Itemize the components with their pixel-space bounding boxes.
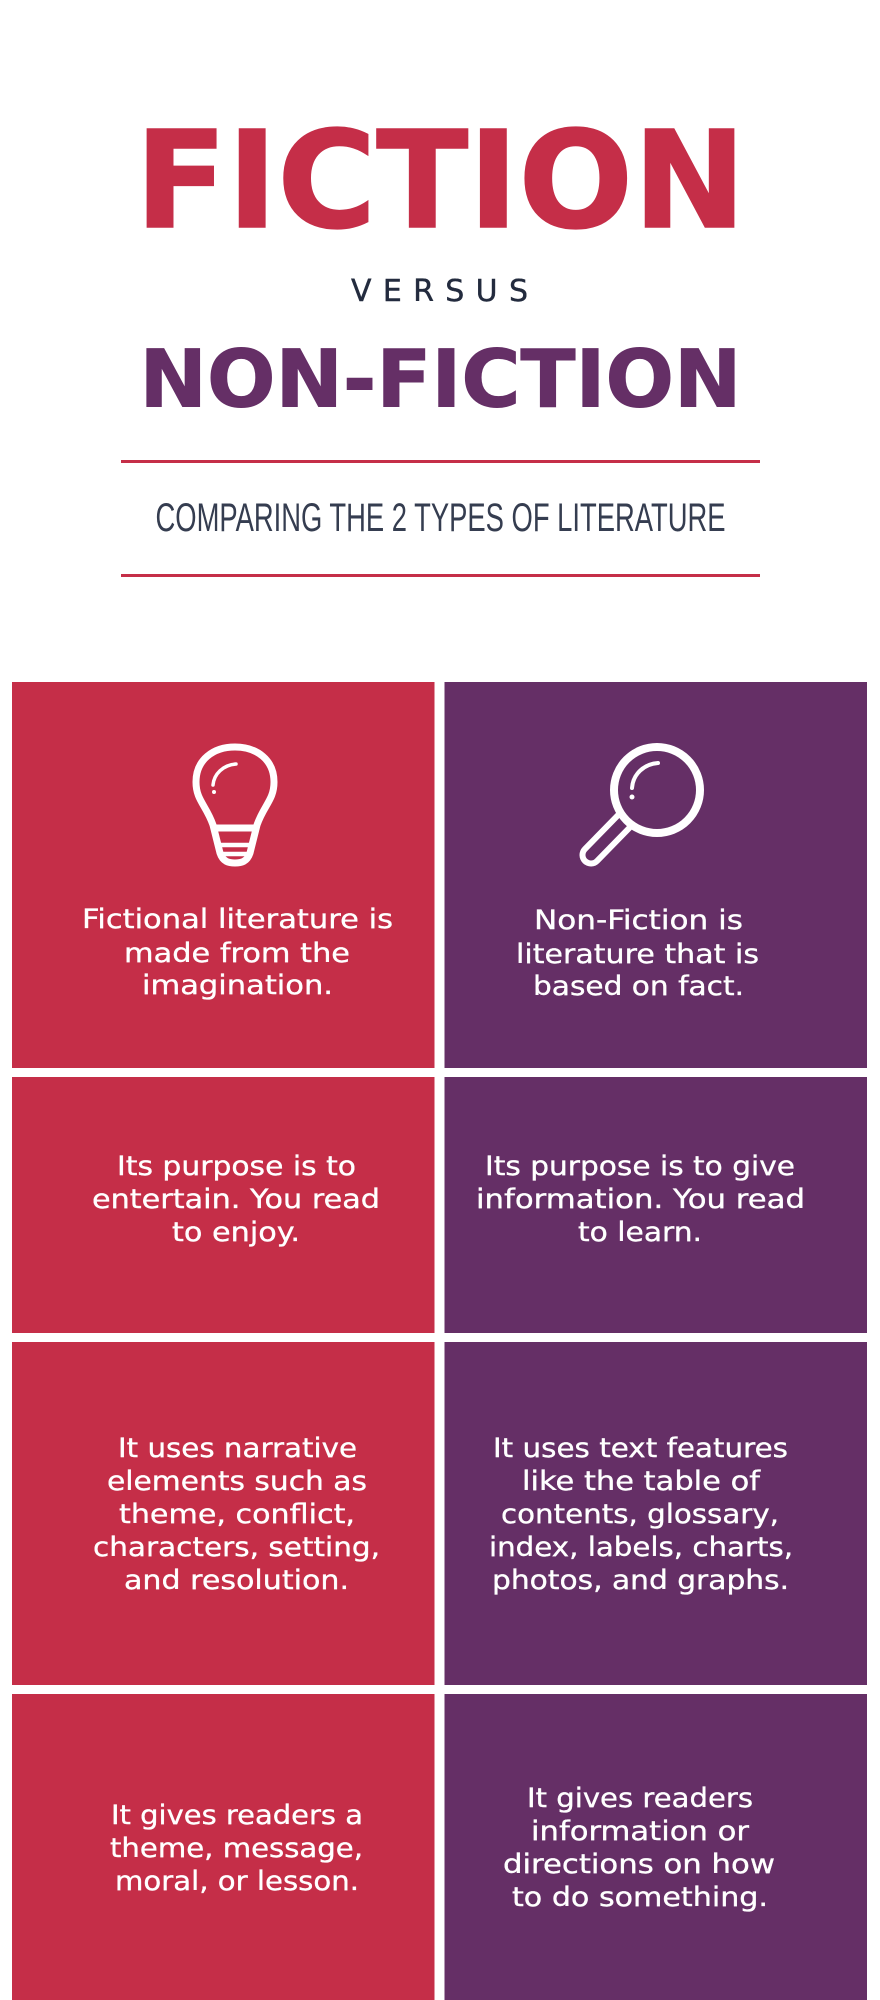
panel: non-fiction directions: It gives readers bbox=[527, 1783, 753, 1814]
panel: non-fiction text features: It uses text features bbox=[493, 1433, 788, 1464]
panel: fiction purpose: Its purpose is to bbox=[117, 1151, 356, 1182]
panel: fiction imagination bbox=[12, 682, 434, 1068]
title: Fiction: FICTION bbox=[135, 102, 746, 259]
text: fiction imagination bbox=[82, 904, 393, 1001]
panel: non-fiction directions: information or bbox=[531, 1816, 750, 1847]
panel: non-fiction directions bbox=[444, 1694, 867, 2000]
panel: fiction theme: moral, or lesson. bbox=[115, 1866, 359, 1897]
panel: non-fiction purpose: to learn. bbox=[578, 1217, 702, 1248]
text: fiction imagination: imagination. bbox=[142, 970, 333, 1001]
panel: non-fiction purpose: information. You read bbox=[476, 1184, 805, 1215]
panel: non-fiction text features: like the table of bbox=[522, 1466, 762, 1497]
panel: fiction purpose: entertain. You read bbox=[92, 1184, 380, 1215]
panel: fiction theme: theme, message, bbox=[110, 1833, 363, 1864]
text: non-fiction fact: literature that is bbox=[516, 939, 759, 970]
panel: fiction narrative elements bbox=[12, 1342, 434, 1685]
text: non-fiction fact: Non-Fiction is bbox=[534, 905, 743, 936]
text: non-fiction fact bbox=[516, 905, 759, 1002]
icon: magnifying glass bbox=[591, 747, 700, 855]
icon: light bulb bbox=[196, 747, 274, 863]
panel: non-fiction directions: to do something. bbox=[512, 1882, 768, 1913]
panel: non-fiction fact bbox=[444, 682, 867, 1068]
panel: non-fiction purpose: Its purpose is to give bbox=[485, 1151, 795, 1182]
text: fiction imagination: made from the bbox=[124, 938, 350, 969]
panel: fiction narrative elements: It uses narrative bbox=[118, 1433, 357, 1464]
panel: fiction narrative elements: elements such as bbox=[107, 1466, 367, 1497]
title: Non-Fiction: NON-FICTION bbox=[140, 332, 742, 426]
text: fiction imagination: Fictional literature is bbox=[82, 904, 393, 935]
panel: non-fiction text features: contents, glossary, bbox=[501, 1499, 779, 1530]
panel: fiction narrative elements: characters, setting, bbox=[93, 1532, 380, 1563]
text: non-fiction fact: based on fact. bbox=[533, 971, 744, 1002]
heading: versus: VERSUS bbox=[351, 274, 528, 309]
panel: non-fiction purpose bbox=[444, 1077, 867, 1333]
panel: non-fiction text features: photos, and graphs. bbox=[492, 1565, 789, 1596]
panel: fiction theme: It gives readers a bbox=[111, 1800, 363, 1831]
panel: fiction narrative elements: theme, conflict, bbox=[119, 1499, 355, 1530]
panel: non-fiction directions: directions on how bbox=[503, 1849, 775, 1880]
panel: non-fiction text features bbox=[444, 1342, 867, 1685]
panel: non-fiction text features: index, labels, charts, bbox=[489, 1532, 793, 1563]
panel: fiction purpose: to enjoy. bbox=[172, 1217, 300, 1248]
panel: fiction narrative elements: and resolution. bbox=[124, 1565, 349, 1596]
panel: fiction purpose bbox=[12, 1077, 434, 1333]
panel: fiction theme bbox=[12, 1694, 434, 2000]
